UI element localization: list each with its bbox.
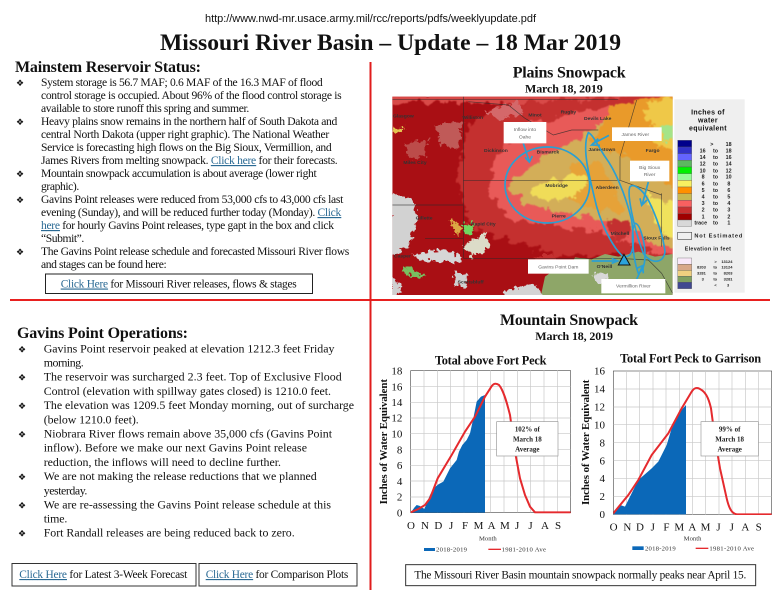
legend: inches of water equivalent: to [713, 214, 719, 220]
date: mountain snowpack: March 18, 2019 [535, 329, 613, 343]
map: city labels: Bismarck [537, 150, 559, 156]
legend: inches of water equivalent: 6 [702, 181, 705, 187]
chart: total above Fort Peck: 0 [397, 507, 403, 519]
legend: inches of water equivalent: 4 [702, 194, 705, 200]
chart: total above Fort Peck: Month [479, 535, 497, 542]
legend: inches of water equivalent: 10 [726, 175, 732, 181]
bullet list: operations: ❖ [18, 345, 26, 355]
source URL: http://www.nwd-mr.usace.army.mil/rcc/reports/pdfs/weeklyupdate.pdf [205, 13, 537, 25]
legend: inches of water equivalent: 5 [727, 194, 730, 200]
chart: total above Fort Peck: March 18 [513, 435, 542, 443]
chart: total above Fort Peck: J [528, 520, 533, 532]
link box: river releases: Click Here for Missouri River releases, flows & stages [61, 278, 297, 290]
map: city labels: Glasgow [393, 114, 414, 120]
map callout: Gavins Point Dam: Gavins Point Dam [538, 264, 578, 270]
legend: inches of water equivalent: 13124 [721, 259, 733, 264]
map callout: Big Sioux River [630, 161, 669, 181]
chart: total above Fort Peck: M [474, 520, 484, 532]
map: city labels: Fargo [646, 148, 660, 154]
legend: inches of water equivalent: 12 [700, 162, 706, 168]
bullet list: reservoir status: available to store runoff this spring and summer. [41, 102, 249, 115]
map callout: Big Sioux River: River [644, 172, 656, 178]
legend: inches of water equivalent: 18 [726, 148, 732, 154]
bullet list: operations: (below 1210.0 feet). [44, 412, 139, 426]
map callout: inflow into Oahe: Inflow into [514, 127, 536, 133]
map callout: Vermillion River [601, 279, 665, 293]
map: city labels: Pierre [552, 214, 566, 220]
legend: inches of water equivalent: to [713, 175, 719, 181]
legend: inches of water equivalent: > [710, 142, 713, 148]
bullet list: operations: inflow). Before we make our next Gavins Point release [44, 441, 307, 455]
chart: total Fort Peck to Garrison: 2018-2019 [645, 546, 676, 553]
map: city labels: Rugby [561, 109, 576, 115]
chart: total above Fort Peck: 2 [397, 492, 402, 504]
legend: inches of water equivalent: equivalent [689, 126, 727, 133]
chart: total Fort Peck to Garrison: J [651, 522, 656, 534]
map: city labels: O'Neill [597, 264, 613, 270]
chart: total above Fort Peck: 1981-2010 Ave [502, 547, 546, 554]
chart: total Fort Peck to Garrison: O [610, 522, 618, 534]
bullet list: operations [18, 341, 354, 540]
legend: inches of water equivalent: 8 [727, 181, 730, 187]
chart: total above Fort Peck: J [449, 520, 454, 532]
map callout: inflow into Oahe [504, 122, 546, 143]
heading: gavins point operations: Gavins Point Operations: [17, 325, 188, 342]
chart: total above Fort Peck: Total above Fort Peck [435, 353, 547, 367]
map: city labels: Mitchell [611, 231, 630, 237]
legend: inches of water equivalent: 8 [702, 175, 705, 181]
legend: inches of water equivalent: 3 [727, 208, 730, 214]
map: city labels: Miles City [403, 160, 427, 166]
chart: total above Fort Peck: 12 [391, 413, 402, 425]
chart: total above Fort Peck: 10 [391, 429, 403, 441]
bullet list: reservoir status: here for hourly Gavins Point releases, type gapt in the box and click [41, 219, 334, 232]
legend: inches of water equivalent: 10 [700, 168, 706, 174]
chart: total Fort Peck to Garrison: 4 [599, 473, 605, 485]
bullet list: reservoir status: Mountain snowpack accumulation is about average (lower right [41, 167, 317, 180]
chart: total above Fort Peck: 4 [397, 476, 403, 488]
legend: inches of water equivalent: to [713, 162, 719, 168]
link box: 3-week forecast: Click Here for Latest 3-Week Forecast [19, 569, 188, 581]
bullet list: reservoir status: “Submit”. [41, 232, 84, 245]
legend: inches of water equivalent: 16 [700, 148, 706, 154]
heading: mountain snowpack: Mountain Snowpack [500, 312, 638, 329]
bullet list: reservoir status: Heavy plains snow remains in the northern half of South Dakota and [41, 115, 338, 128]
chart: total above Fort Peck: D [434, 520, 442, 532]
chart: total above Fort Peck: Average [515, 445, 539, 453]
legend: inches of water equivalent: water [697, 118, 718, 125]
chart: total Fort Peck to Garrison: D [636, 522, 644, 534]
map: city labels: Sioux Falls [643, 235, 670, 241]
legend: inches of water equivalent: to [713, 181, 719, 187]
legend: inches of water equivalent: 3281 [724, 277, 733, 282]
chart: total Fort Peck to Garrison [580, 351, 772, 553]
chart: total Fort Peck to Garrison: 99% of [719, 425, 741, 433]
legend: inches of water equivalent: Inches of [691, 110, 725, 117]
divider: horizontal red line [10, 299, 770, 301]
bullet list: operations: morning. [44, 356, 84, 370]
bullet list: reservoir status: ❖ [16, 248, 24, 258]
map: city labels: Jamestown [588, 147, 615, 153]
callout: snowpack peak note: The Missouri River Basin mountain snowpack normally peaks near April 15. [414, 569, 746, 581]
chart: total Fort Peck to Garrison: 0 [599, 509, 605, 521]
chart: total Fort Peck to Garrison: Month [684, 535, 702, 542]
chart: total Fort Peck to Garrison: 14 [594, 384, 606, 396]
chart: total Fort Peck to Garrison: 16 [594, 366, 606, 378]
bullet list: operations: time. [44, 512, 67, 526]
chart: total Fort Peck to Garrison: Total Fort Peck to Garrison [620, 351, 761, 365]
chart: total above Fort Peck [378, 353, 571, 554]
bullet list: reservoir status: central North Dakota (upper right graphic). The National Weather [41, 128, 329, 141]
map: blue river basin outlines and arrows [505, 133, 665, 287]
bullet list: operations: ❖ [18, 374, 26, 384]
panel: mainstem reservoir status [15, 59, 350, 294]
legend: inches of water equivalent: trace [694, 221, 707, 227]
divider: vertical red line [370, 62, 372, 590]
bullet list: operations: We are not making the release reductions that we planned [44, 469, 317, 483]
panel: gavins point operations [12, 325, 357, 586]
legend: inches of water equivalent: 2 [727, 214, 730, 220]
chart: total above Fort Peck: S [555, 520, 561, 532]
chart: total above Fort Peck: 2018-2019 [436, 547, 468, 554]
legend: inches of water equivalent: 3 [727, 283, 730, 288]
legend: inches of water equivalent: to [713, 277, 718, 282]
chart: total above Fort Peck: 16 [391, 381, 403, 393]
legend: inches of water equivalent: < [714, 283, 717, 288]
map: city labels: Devils Lake [584, 116, 612, 122]
chart: total above Fort Peck: J [515, 520, 520, 532]
chart: total Fort Peck to Garrison: J [716, 522, 721, 534]
bullet list: reservoir status [16, 76, 350, 271]
map: southern low-snow green area [541, 252, 673, 295]
chart: total Fort Peck to Garrison: 2 [599, 491, 605, 503]
chart: total Fort Peck to Garrison: S [756, 522, 762, 534]
bullet list: reservoir status: and stages can be found here: [41, 258, 167, 271]
date: plains snowpack: March 18, 2019 [525, 82, 603, 96]
map callout: inflow into Oahe: Oahe [519, 134, 531, 140]
chart: total above Fort Peck: M [500, 520, 510, 532]
map: city labels: Gillette [416, 215, 433, 221]
bullet list: operations: The reservoir was surcharged 2.3 feet. Top of Exclusive Flood [44, 370, 342, 384]
legend: inches of water equivalent [674, 99, 745, 293]
chart: total Fort Peck to Garrison: March 18 [715, 435, 745, 443]
chart: total above Fort Peck: A [488, 520, 496, 532]
bullet list: operations: reduction, the inflows will need to decline further. [44, 455, 281, 469]
link box: river releases [46, 274, 312, 294]
legend: inches of water equivalent: to [713, 155, 719, 161]
bullet list: reservoir status: evening (Sunday), and will be reduced further today (Monday). Click [41, 206, 342, 219]
legend: inches of water equivalent: 6 [727, 188, 730, 194]
link box: 3-week forecast [12, 564, 196, 586]
bullet list: reservoir status: James Rivers from melting snowpack. Click here for their forecasts. [41, 154, 338, 167]
chart: total Fort Peck to Garrison: Inches of Water Equivalent [580, 379, 592, 505]
chart: total Fort Peck to Garrison: 8 [599, 437, 605, 449]
map: city labels: Dickinson [484, 148, 508, 154]
map: city labels: Williston [462, 115, 483, 121]
bullet list: reservoir status: control storage is occupied. About 96% of the flood control storage is [41, 89, 342, 102]
legend: inches of water equivalent: to [713, 271, 718, 276]
bullet list: reservoir status: System storage is 56.7 MAF; 0.6 MAF of the 16.3 MAF of flood [41, 76, 323, 89]
chart: total above Fort Peck: Inches of Water Equivalent [378, 379, 390, 504]
bullet list: operations: Gavins Point reservoir peaked at elevation 1212.3 feet Friday [44, 341, 334, 355]
legend: inches of water equivalent: 4 [727, 201, 730, 207]
legend: inches of water equivalent: to [713, 208, 719, 214]
chart: total Fort Peck to Garrison: A [688, 522, 696, 534]
legend: inches of water equivalent: 14 [700, 155, 706, 161]
callout: snowpack peak note [406, 565, 756, 586]
chart: total above Fort Peck: N [421, 520, 429, 532]
map: city labels: Mobridge [545, 183, 568, 189]
chart: total Fort Peck to Garrison: N [623, 522, 631, 534]
legend: inches of water equivalent: to [713, 221, 719, 227]
legend: inches of water equivalent: 12 [726, 168, 732, 174]
bullet list: reservoir status: Service is forecasting high flows on the Big Sioux, Vermillion, and [41, 141, 332, 154]
legend: inches of water equivalent: to [713, 188, 719, 194]
icon: Gavins Point Dam triangle [618, 254, 630, 265]
bullet list: operations: ❖ [18, 402, 26, 412]
map: city labels: Rapid City [471, 221, 496, 227]
map callout: Big Sioux River: Big Sioux [639, 165, 661, 171]
legend: inches of water equivalent: to [713, 201, 719, 207]
legend: inches of water equivalent: 8203 [697, 265, 707, 270]
bullet list: reservoir status: ❖ [16, 79, 24, 89]
chart: total Fort Peck to Garrison: M [674, 522, 684, 534]
legend: inches of water equivalent: Not Estimated [694, 234, 743, 240]
map callout: James River [612, 127, 662, 141]
map: city labels: Minot [528, 112, 542, 118]
legend: inches of water equivalent: 8203 [724, 271, 733, 276]
panel: mountain snowpack [378, 312, 772, 586]
legend: inches of water equivalent: > [714, 259, 717, 264]
map callout: James River: James River [621, 132, 650, 138]
map: city labels [393, 109, 670, 285]
chart: total above Fort Peck: 8 [397, 444, 403, 456]
legend: inches of water equivalent: 3281 [697, 271, 707, 276]
chart: total above Fort Peck: 18 [391, 365, 403, 377]
chart: total Fort Peck to Garrison: M [701, 522, 711, 534]
chart: total above Fort Peck: 6 [397, 460, 403, 472]
bullet list: operations: ❖ [18, 530, 26, 540]
legend: inches of water equivalent: to [713, 168, 719, 174]
bullet list: operations: Niobrara River flows remain above 35,000 cfs (Gavins Point [44, 427, 333, 441]
legend: inches of water equivalent: 5 [702, 188, 705, 194]
legend: inches of water equivalent: to [713, 194, 719, 200]
chart: total Fort Peck to Garrison: 6 [599, 455, 605, 467]
bullet list: operations: Fort Randall releases are being reduced back to zero. [44, 526, 295, 540]
chart: total Fort Peck to Garrison: 12 [594, 402, 605, 414]
chart: total above Fort Peck: O [407, 520, 415, 532]
map: city labels: Scottsbluff [458, 279, 484, 285]
map: city labels: Casper [394, 254, 411, 260]
map callout: Vermillion River: Vermillion River [616, 284, 651, 290]
legend: inches of water equivalent: 1 [702, 214, 705, 220]
bullet list: operations: The elevation was 1209.5 feet Monday morning, out of surcharge [44, 398, 354, 412]
map borders [392, 97, 673, 293]
legend: inches of water equivalent: 13124 [721, 265, 733, 270]
chart: total Fort Peck to Garrison: 1981-2010 Ave [709, 546, 754, 553]
bullet list: operations: ❖ [18, 473, 26, 483]
legend: inches of water equivalent: 2 [702, 208, 705, 214]
bullet list: reservoir status: The Gavins Point release schedule and forecasted Missouri River flows [41, 245, 350, 258]
bullet list: reservoir status: graphic). [41, 180, 79, 193]
chart: total Fort Peck to Garrison: F [663, 522, 669, 534]
bullet list: operations: Control (elevation with spillway gates closed) is 1210.0 feet. [44, 384, 331, 398]
legend: inches of water equivalent: 3 [702, 277, 705, 282]
legend: inches of water equivalent: 14 [726, 162, 732, 168]
legend: inches of water equivalent: to [713, 265, 718, 270]
panel: plains snowpack [390, 64, 745, 297]
chart: total above Fort Peck: A [541, 520, 549, 532]
bullet list: reservoir status: ❖ [16, 118, 24, 128]
legend: inches of water equivalent: 1 [727, 221, 730, 227]
map: city labels: Aberdeen [596, 185, 619, 191]
legend: inches of water equivalent: to [713, 148, 719, 154]
link box: comparison plots: Click Here for Comparison Plots [206, 569, 349, 581]
bullet list: operations: yesterday. [44, 483, 87, 497]
chart: total above Fort Peck: 102% of [515, 425, 541, 433]
map: plains snow water equivalent [390, 93, 678, 297]
title: Missouri River Basin – Update – 18 Mar 2019 [160, 30, 621, 56]
map callout: Gavins Point Dam [528, 259, 589, 274]
chart: total Fort Peck to Garrison: 10 [594, 419, 606, 431]
bullet list: reservoir status: Gavins Point releases were reduced from 53,000 cfs to 43,000 cfs last [41, 193, 344, 206]
legend: inches of water equivalent: 18 [726, 142, 732, 148]
chart: total Fort Peck to Garrison: A [741, 522, 749, 534]
heading: mainstem reservoir status: Mainstem Reservoir Status: [15, 59, 201, 76]
chart: total Fort Peck to Garrison: Average [718, 445, 742, 453]
link box: comparison plots [199, 564, 357, 586]
legend: inches of water equivalent: Elevation in feet [685, 247, 731, 253]
legend: inches of water equivalent: 16 [726, 155, 732, 161]
bullet list: reservoir status: ❖ [16, 170, 24, 180]
heading: plains snowpack: Plains Snowpack [513, 64, 626, 82]
chart: total above Fort Peck: 14 [391, 397, 403, 409]
chart: total above Fort Peck: F [462, 520, 468, 532]
bullet list: operations: ❖ [18, 431, 26, 441]
bullet list: operations: ❖ [18, 501, 26, 511]
chart: total Fort Peck to Garrison: J [730, 522, 735, 534]
bullet list: operations: We are re-assessing the Gavins Point release schedule at this [44, 497, 331, 511]
bullet list: reservoir status: ❖ [16, 196, 24, 206]
legend: inches of water equivalent: 3 [702, 201, 705, 207]
